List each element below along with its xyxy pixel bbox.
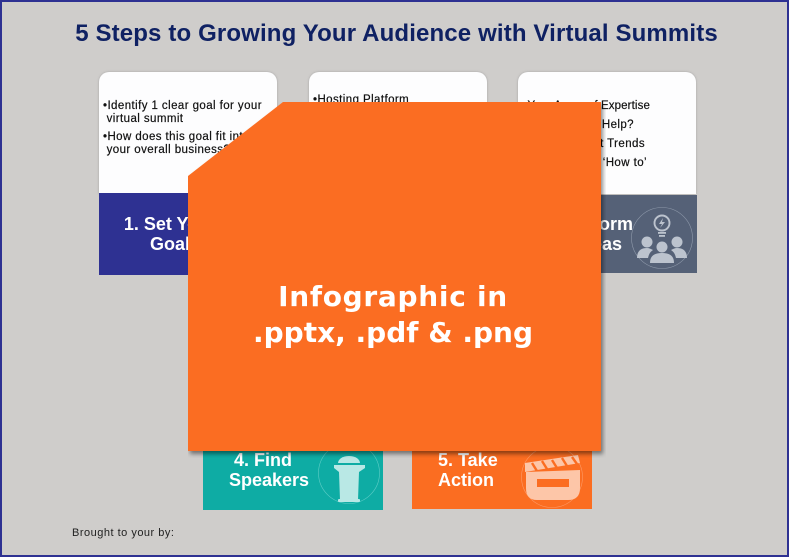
- overlay shape: [188, 102, 606, 457]
- icon: podium: [318, 451, 380, 504]
- title: 5 Steps to Growing Your Audience with Virtual Summits: [75, 20, 718, 47]
- step 1 bullet: clear goal: •Identify 1 clear goal for your: [103, 100, 262, 112]
- icon: audience with lightbulb: [631, 207, 693, 269]
- step 3 text card: [518, 72, 696, 194]
- step 5 label: Action: [438, 470, 494, 490]
- step 3 label: Ideas: [576, 234, 622, 254]
- step 1 label: [124, 214, 216, 254]
- step 1 bullet: business fit: [103, 130, 250, 156]
- panel: step 1 set your goal: [98, 71, 278, 275]
- panel: step 2 hosting: [308, 71, 488, 106]
- step 2 bullet: hosting platform: •Hosting Platform: [313, 94, 409, 106]
- overlay panel: infographic formats: [188, 102, 606, 457]
- step 4 label: [229, 450, 309, 490]
- step 3 line: help: Who Can You Help?: [523, 119, 634, 131]
- step 1 label: 1. Set Your: [124, 214, 216, 234]
- step 3 line: trends: Market Trends: [566, 138, 645, 150]
- step 1 bullet: business fit: •How does this goal fit into: [103, 131, 250, 143]
- step 3 label: [537, 214, 633, 254]
- overlay heading: Infographic in: [278, 280, 508, 313]
- step 4 label: 4. Find: [234, 450, 292, 470]
- panel: step 3 brainstorm ideas: [517, 71, 697, 273]
- icon: clapperboard: [521, 451, 583, 508]
- step 3 label: Brainstorm: [537, 214, 633, 234]
- step 1 label: Goal: [150, 234, 190, 254]
- step 1 bullet: clear goal: virtual summit: [107, 112, 183, 124]
- step 1 band: [99, 193, 277, 275]
- step 3 band: [518, 195, 697, 273]
- step 2 text card: [309, 72, 487, 194]
- step 5 label: 5. Take: [438, 450, 498, 470]
- step 3 line: expertise: Your Areas of Expertise: [527, 100, 650, 112]
- overlay heading: [253, 280, 533, 349]
- panel: step 5 take action: [412, 440, 592, 509]
- overlay heading: .pptx, .pdf & .png: [253, 316, 533, 349]
- footer credit: Brought to your by:: [72, 527, 174, 539]
- step 1 bullet: business fit: your overall business?: [107, 144, 230, 156]
- panel: step 4 find speakers: [203, 440, 383, 510]
- step 1 text card: [99, 72, 277, 194]
- step 1 bullet: clear goal: [103, 100, 262, 124]
- step 4 label: Speakers: [229, 470, 309, 490]
- step 5 label: [438, 450, 498, 490]
- step 3 line: how to: Teach a ‘How to’: [556, 157, 647, 169]
